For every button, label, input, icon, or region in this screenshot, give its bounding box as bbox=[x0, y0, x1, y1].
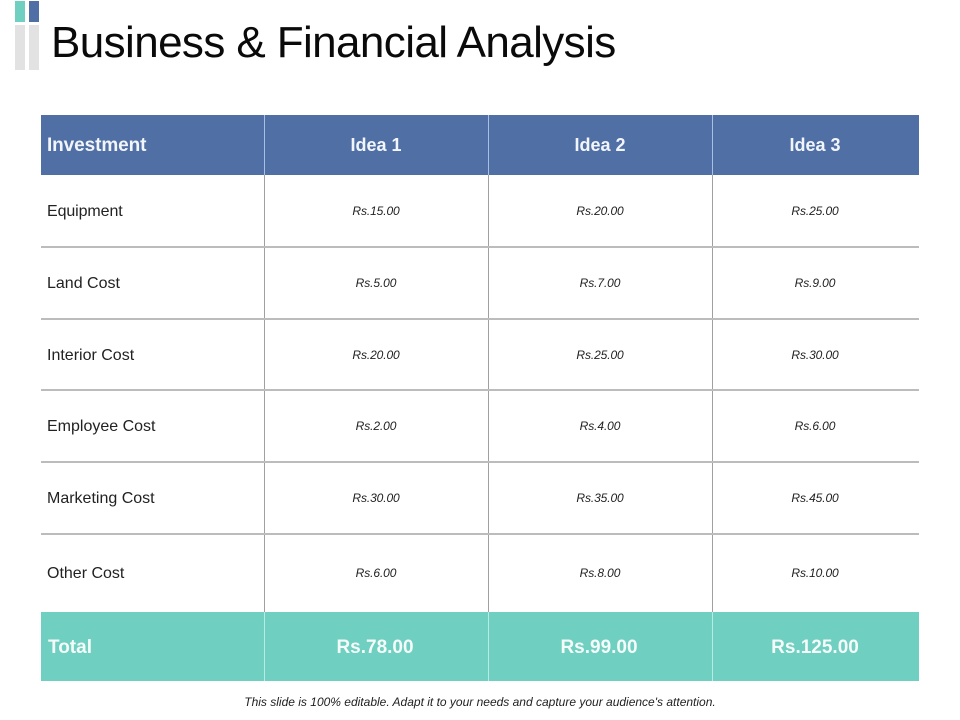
row: Marketing Cost: Rs.35.00 bbox=[576, 491, 624, 505]
row: Interior Cost bbox=[47, 347, 839, 364]
row: Employee Cost: Employee Cost bbox=[47, 418, 156, 435]
total idea 3: Rs.125.00 bbox=[771, 637, 859, 658]
header: Idea 2: Idea 2 bbox=[574, 135, 626, 155]
footer note: This slide is 100% editable. Adapt it to your needs and capture your audience's attention. bbox=[244, 695, 716, 709]
title: Business & Financial Analysis bbox=[51, 18, 616, 67]
row: Land Cost: Rs.7.00 bbox=[580, 276, 620, 290]
row: Interior Cost: Interior Cost bbox=[47, 347, 134, 364]
row: Other Cost: Other Cost bbox=[47, 565, 124, 582]
row: Equipment: Rs.25.00 bbox=[791, 204, 839, 218]
row: Employee Cost: Rs.4.00 bbox=[580, 419, 620, 433]
row: Other Cost bbox=[47, 565, 839, 582]
row: Equipment bbox=[47, 203, 839, 220]
row: Employee Cost bbox=[47, 418, 836, 435]
total idea 1: Rs.78.00 bbox=[336, 637, 414, 658]
panel: header row bbox=[41, 115, 919, 175]
row: Equipment: Rs.15.00 bbox=[352, 204, 400, 218]
row: Equipment: Equipment bbox=[47, 203, 123, 220]
row: Land Cost: Land Cost bbox=[47, 275, 120, 292]
row: Marketing Cost: Rs.30.00 bbox=[352, 491, 400, 505]
panel: total row bbox=[41, 612, 919, 681]
row: Interior Cost: Rs.30.00 bbox=[791, 348, 839, 362]
row: Marketing Cost bbox=[47, 490, 839, 507]
header: Idea 3: Idea 3 bbox=[789, 135, 841, 155]
row: Land Cost: Rs.9.00 bbox=[795, 276, 835, 290]
row: Other Cost: Rs.8.00 bbox=[580, 566, 620, 580]
total idea 2: Rs.99.00 bbox=[560, 637, 638, 658]
row: Marketing Cost: Marketing Cost bbox=[47, 490, 155, 507]
row: Interior Cost: Rs.25.00 bbox=[576, 348, 624, 362]
table bbox=[41, 115, 919, 681]
header: Investment: Investment bbox=[47, 135, 146, 156]
row: Employee Cost: Rs.6.00 bbox=[795, 419, 835, 433]
row: Other Cost: Rs.6.00 bbox=[356, 566, 396, 580]
icon: title accent bars bbox=[15, 1, 39, 70]
row: Marketing Cost: Rs.45.00 bbox=[791, 491, 839, 505]
row: Interior Cost: Rs.20.00 bbox=[352, 348, 400, 362]
total label: Total bbox=[48, 637, 92, 658]
header: Idea 1: Idea 1 bbox=[350, 135, 402, 155]
row: Equipment: Rs.20.00 bbox=[576, 204, 624, 218]
row: Land Cost bbox=[47, 275, 836, 292]
row: Other Cost: Rs.10.00 bbox=[791, 566, 839, 580]
row: Land Cost: Rs.5.00 bbox=[356, 276, 396, 290]
row: Employee Cost: Rs.2.00 bbox=[356, 419, 396, 433]
